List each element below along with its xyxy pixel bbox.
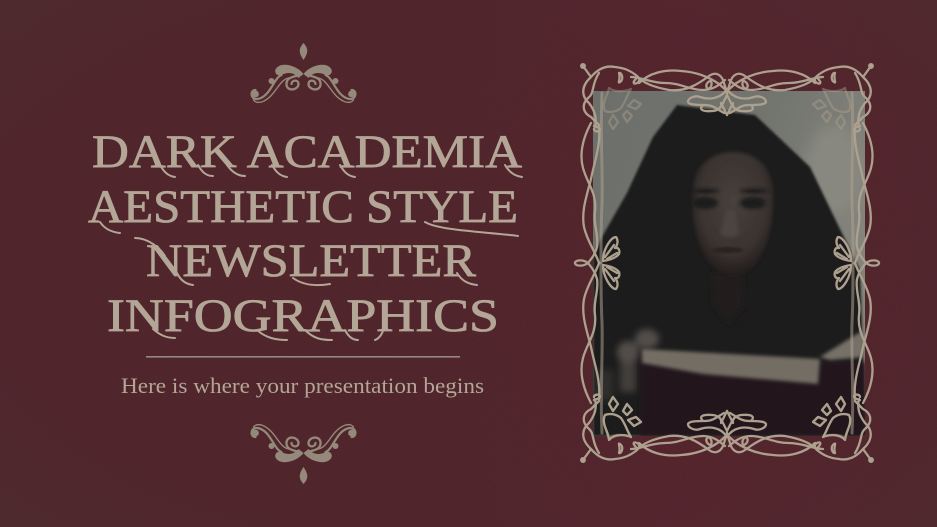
title swashes — [100, 165, 522, 340]
frame top-right quarter — [727, 64, 879, 263]
face — [693, 152, 773, 275]
photo: hooded figure holding a book — [593, 91, 866, 436]
title line 4: INFOGRAPHICS — [107, 290, 499, 342]
frame top-left quarter — [575, 64, 727, 263]
neck — [712, 272, 744, 324]
sky — [593, 91, 865, 436]
book pages — [642, 349, 820, 384]
title line 3: NEWSLETTER — [146, 235, 477, 287]
title line 2: AESTHETIC STYLE — [88, 181, 518, 233]
right page — [820, 329, 865, 360]
title line 1: DARK ACADEMIA — [92, 126, 522, 178]
subtitle: Here is where your presentation begins — [121, 373, 484, 398]
hood — [593, 105, 866, 436]
frame bottom-right quarter — [727, 263, 879, 462]
lower-right leaf cluster — [813, 397, 850, 440]
title — [88, 126, 522, 342]
mouth — [713, 247, 743, 253]
brows and eyes — [691, 188, 768, 209]
book cover — [640, 362, 865, 436]
decorative frame — [575, 64, 879, 462]
top flourish ornament — [252, 43, 355, 102]
bottom flourish ornament — [252, 425, 355, 484]
lower-left leaf cluster — [604, 397, 641, 440]
frame bottom-left quarter — [575, 263, 727, 462]
nose — [721, 213, 738, 236]
divider line — [146, 356, 460, 358]
fingers — [595, 329, 659, 400]
